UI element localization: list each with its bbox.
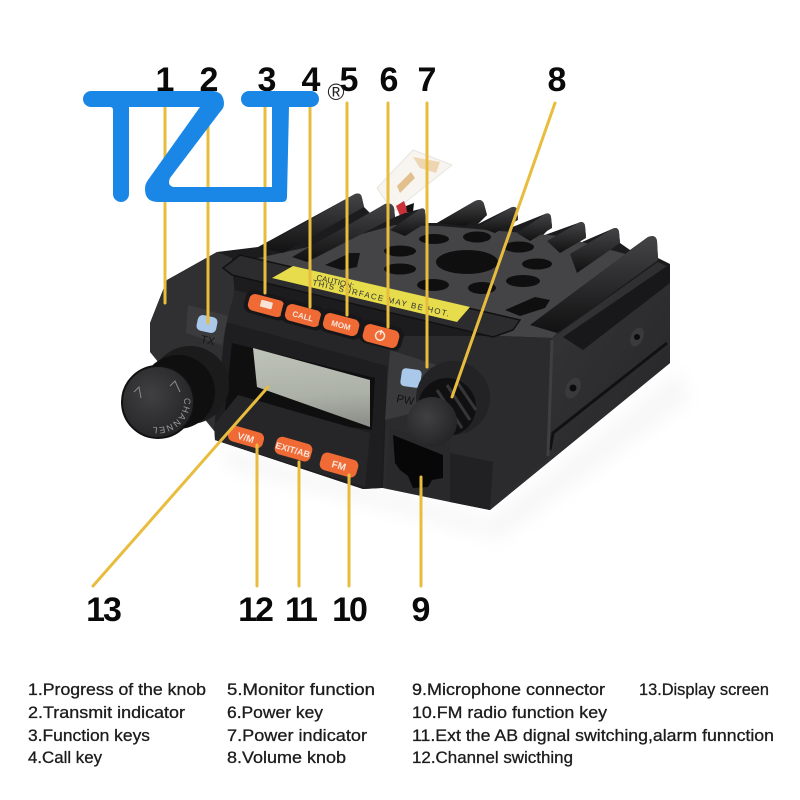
ground shadow <box>220 370 690 540</box>
callout numbers: 12 <box>238 591 273 629</box>
brand logo <box>83 91 319 202</box>
legend column 1: 3.Function keys <box>28 727 150 745</box>
callout numbers: 8 <box>548 61 566 99</box>
top plate <box>225 225 640 338</box>
bottom function keys <box>226 424 360 479</box>
caution label: THIS SURFACE MAY BE HOT. <box>312 278 450 318</box>
lower front box <box>450 453 493 510</box>
side rail <box>563 264 670 350</box>
callout numbers <box>86 61 566 629</box>
legend column 1: 2.Transmit indicator <box>28 704 186 722</box>
legend column 1: 1.Progress of the knob <box>28 681 206 699</box>
call key <box>279 298 328 332</box>
legend column 2 <box>227 681 375 767</box>
transmit indicator: TX <box>199 334 216 349</box>
call key: CALL <box>291 309 314 324</box>
callout numbers: 6 <box>380 61 398 99</box>
FM key: FM <box>330 459 347 474</box>
channel knob: CHANNEL <box>153 398 190 434</box>
callout numbers: 11 <box>285 591 317 629</box>
legend column 3: 9.Microphone connector <box>412 681 606 699</box>
legend column 3: 11.Ext the AB dignal switching,alarm funnction <box>412 727 774 745</box>
legend column 3 <box>412 681 774 767</box>
legend column 2: 6.Power key <box>227 704 324 722</box>
monitor key <box>317 307 366 341</box>
cooling fins left <box>260 194 426 270</box>
callout numbers: 2 <box>200 61 218 99</box>
display window <box>225 343 375 430</box>
caution label: CAUTION: <box>316 273 355 291</box>
transmit indicator <box>186 305 228 349</box>
callout numbers: 3 <box>258 61 276 99</box>
callout numbers: 13 <box>86 591 121 629</box>
side screw holes <box>562 325 647 401</box>
callout numbers: 5 <box>340 61 358 99</box>
fan vent circle and holes <box>384 232 552 316</box>
callout numbers: 10 <box>332 591 367 629</box>
volume knob <box>407 361 490 447</box>
legend column 1 <box>28 681 206 767</box>
LCD screen <box>253 348 370 427</box>
V/M key: V/M <box>236 431 255 446</box>
registered mark: ® <box>328 79 345 105</box>
callout numbers: 9 <box>412 591 430 629</box>
lower key panel <box>214 395 370 487</box>
legend column 2: 5.Monitor function <box>227 681 375 699</box>
legend column 2: 8.Volume knob <box>227 749 346 767</box>
legend column 1: 4.Call key <box>28 749 103 767</box>
power indicator: PW <box>395 393 416 408</box>
radio photo illustration <box>121 150 670 510</box>
monitor key: MOM <box>330 319 352 332</box>
callout numbers: 7 <box>418 61 436 99</box>
function key <box>242 288 291 322</box>
power key <box>357 318 406 352</box>
top plate recess outline <box>223 255 520 337</box>
front corner highlight <box>548 340 552 456</box>
legend column 3: 12.Channel swicthing <box>412 749 573 767</box>
callout numbers: 1 <box>156 61 174 99</box>
power indicator <box>385 350 440 420</box>
legend column 2: 7.Power indicator <box>227 727 368 745</box>
radio body silhouette <box>150 194 670 510</box>
front left shoulder <box>150 252 235 432</box>
microphone connector <box>385 428 450 500</box>
power connector <box>377 150 452 216</box>
callout numbers: 4 <box>302 61 321 99</box>
cooling fins right <box>437 200 658 333</box>
callout lines <box>93 102 555 586</box>
side slot <box>550 343 667 450</box>
caution label <box>272 266 470 322</box>
front right face <box>383 336 552 510</box>
side face <box>490 262 670 510</box>
legend column 4: 13.Display screen <box>639 681 769 699</box>
channel knob <box>121 346 229 439</box>
top function keys <box>242 288 406 352</box>
legend column 3: 10.FM radio function key <box>412 704 608 722</box>
lower plate edge <box>225 290 400 372</box>
display bezel <box>215 322 387 489</box>
EXIT/AB key: EXIT/AB <box>274 440 312 460</box>
